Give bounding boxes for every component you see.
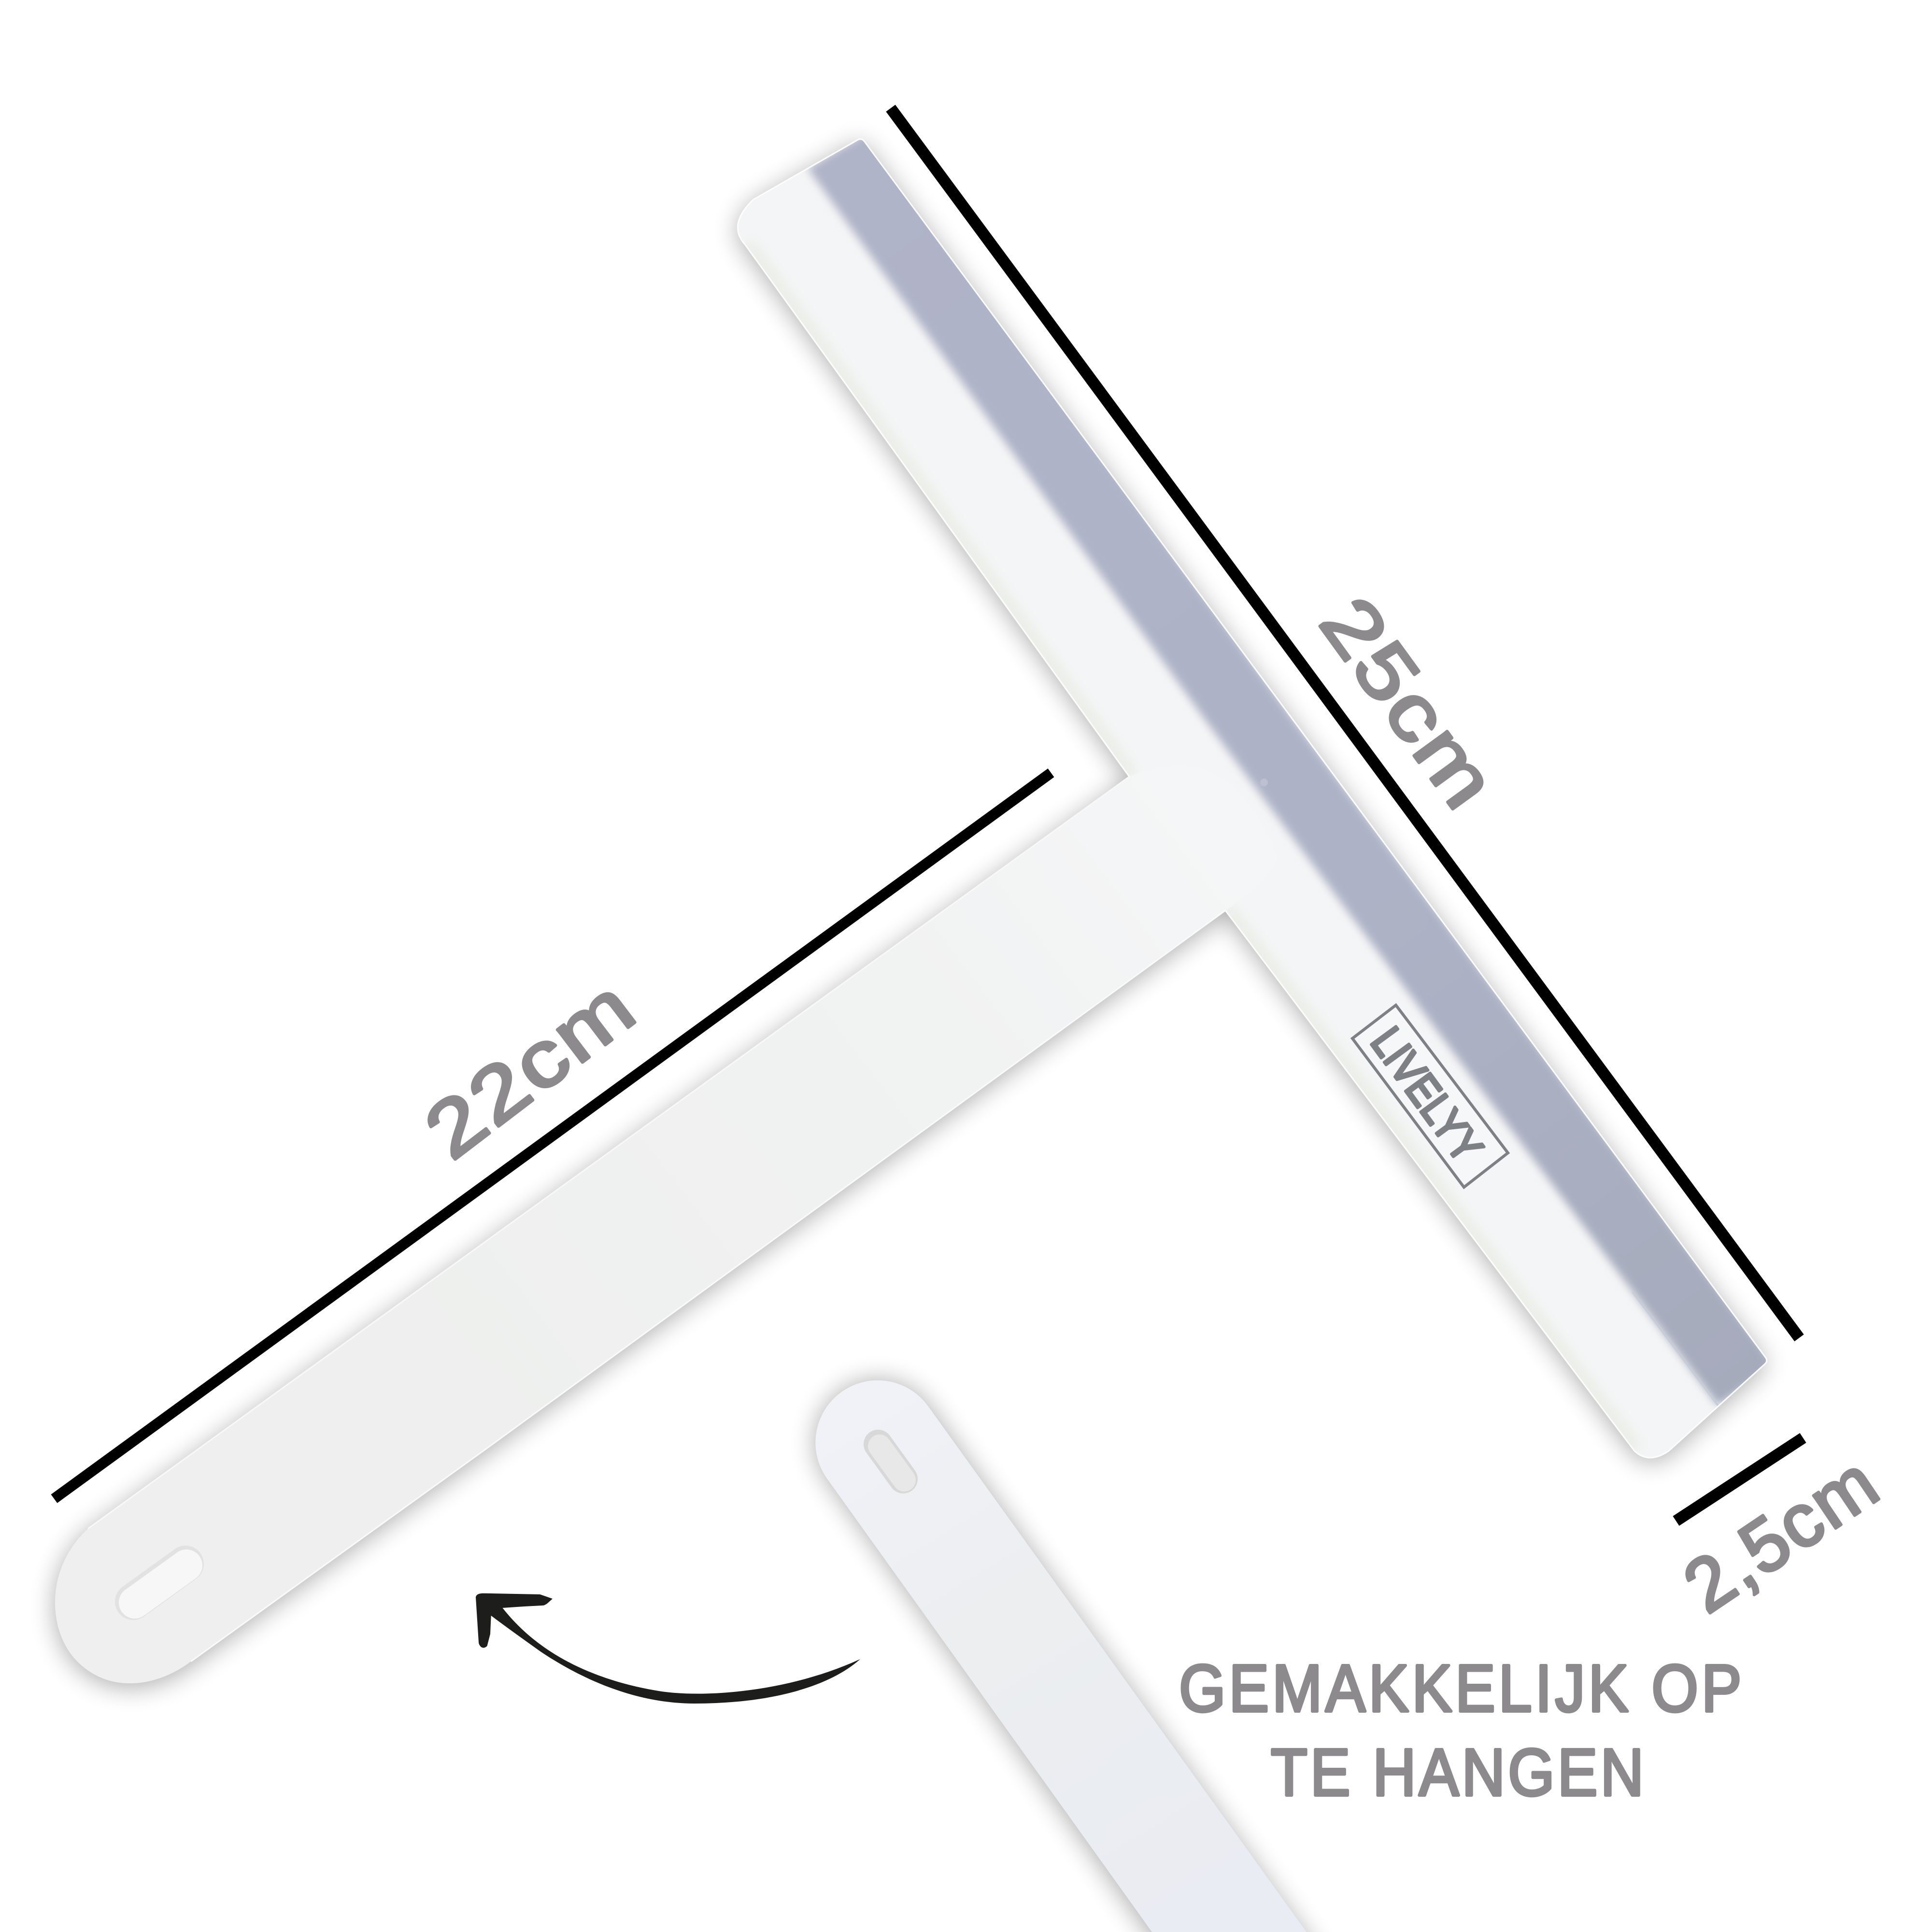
- caption: TE HANGEN: [1271, 1735, 1644, 1809]
- label 2,5cm: 2,5cm: [1669, 1440, 1892, 1628]
- strip edge highlight: [1633, 1292, 1718, 1406]
- caption: [1179, 1651, 1742, 1809]
- bevel along blade edge: [745, 245, 1634, 1451]
- hanging slot: [133, 1564, 186, 1603]
- squeegee handle: [55, 765, 1277, 1683]
- shadow: hanging handle: [815, 1380, 1323, 1932]
- squeegee blade: [738, 130, 1777, 1458]
- label 25cm: 25cm: [1304, 581, 1513, 824]
- second handle with slot: [815, 1380, 1307, 1932]
- dimension line 2,5cm: [1676, 1438, 1803, 1521]
- caption: GEMAKKELIJK OP: [1179, 1651, 1742, 1725]
- slot in second handle: [878, 1444, 904, 1480]
- label 22cm: 22cm: [409, 963, 650, 1175]
- arrow: [476, 1593, 860, 1704]
- dimension line 22cm: [54, 773, 1051, 1499]
- bubble on strip: [1260, 779, 1268, 786]
- dimension line 25cm: [891, 108, 1799, 1338]
- rubber strip: [808, 130, 1777, 1406]
- LIVELYY logo: LIVELYY: [1362, 1019, 1492, 1171]
- shadow: squeegee: [55, 142, 1767, 1687]
